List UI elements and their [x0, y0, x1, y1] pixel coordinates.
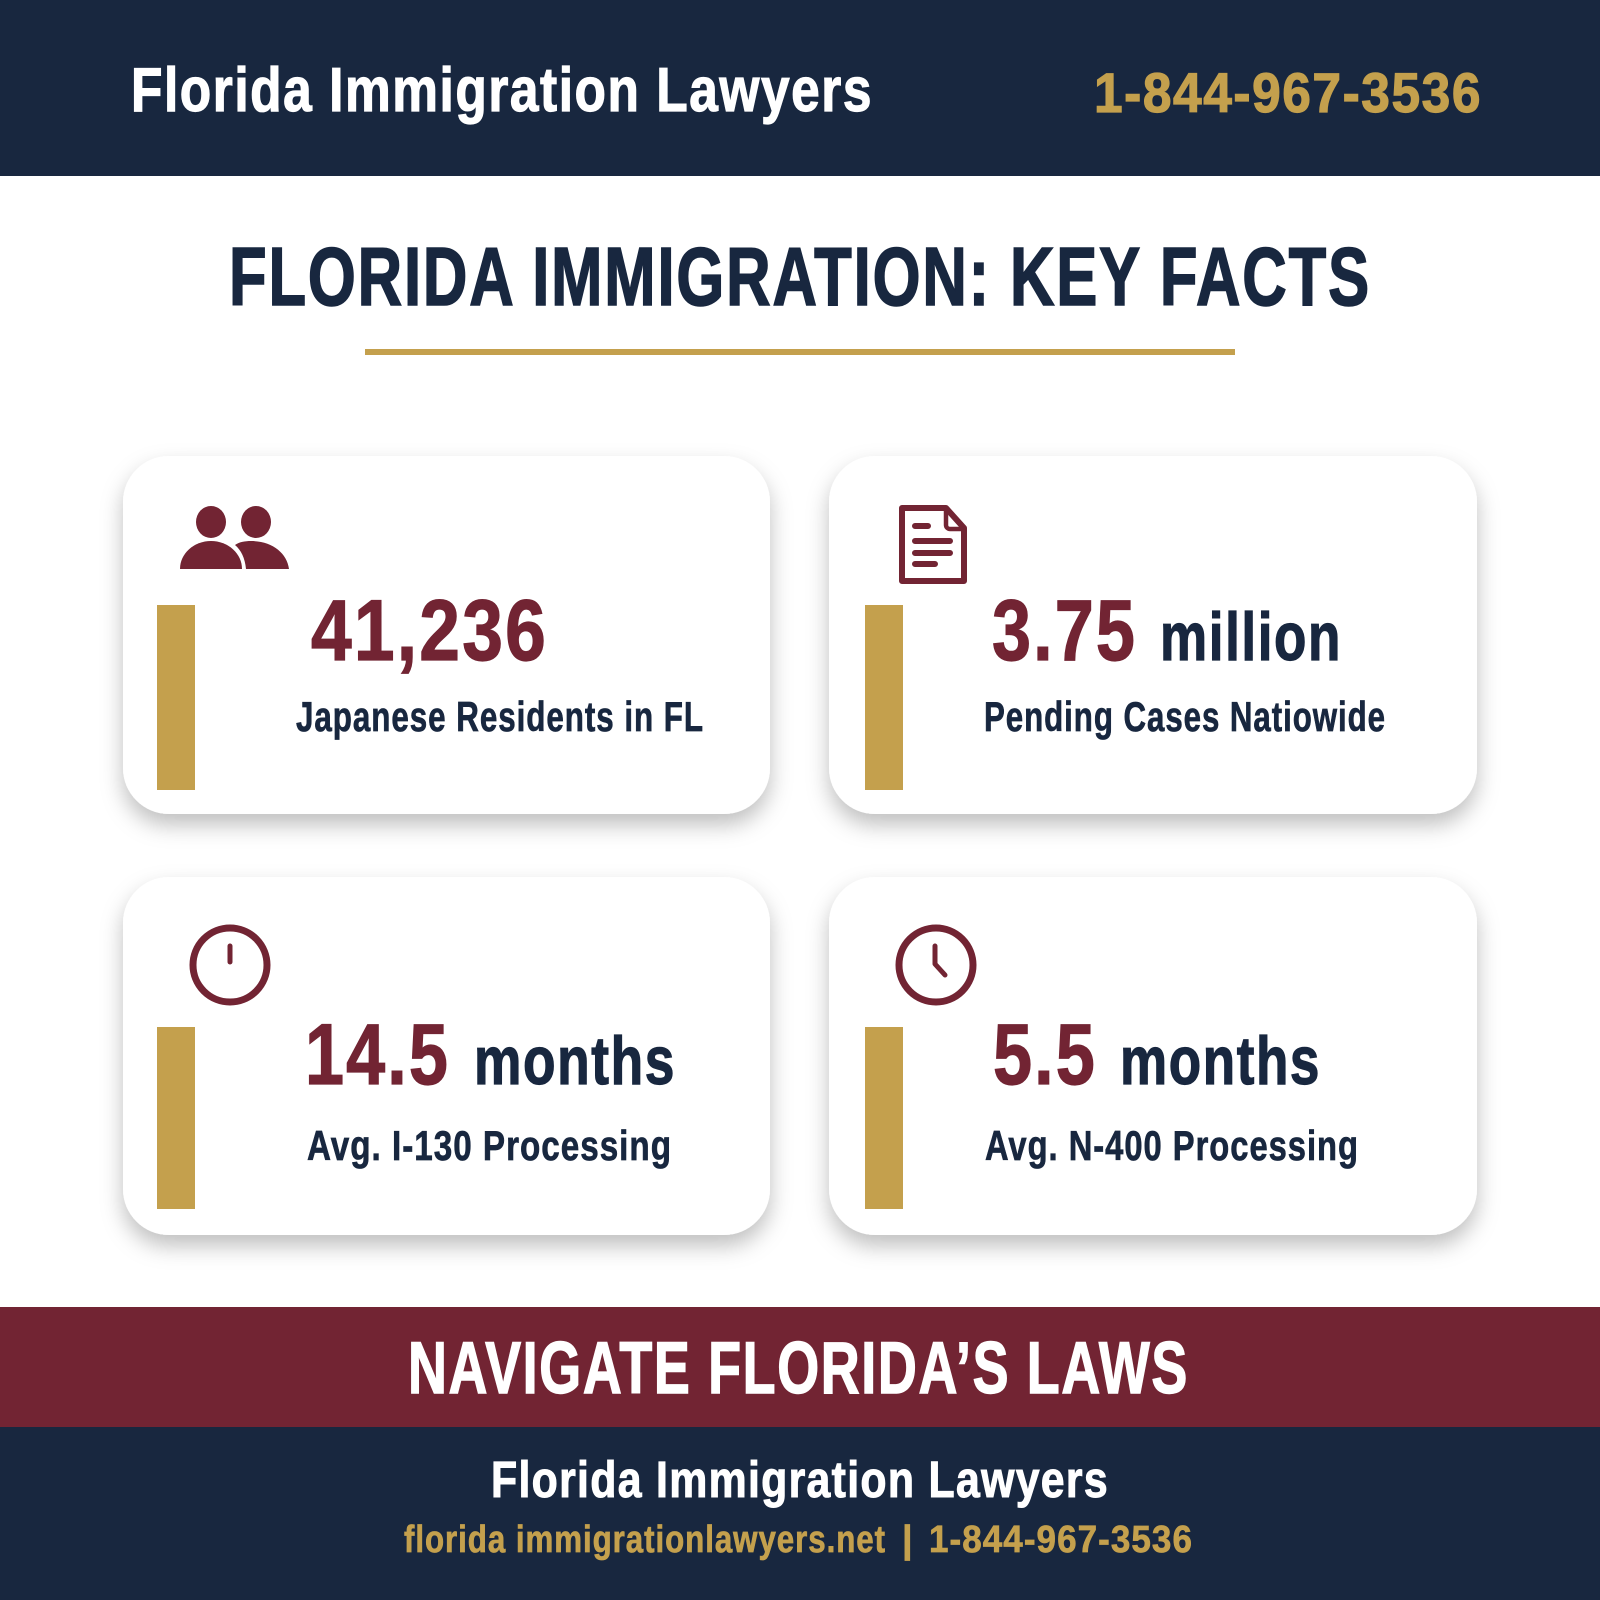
footer contact line: |	[902, 1519, 914, 1561]
gold bar	[157, 605, 195, 790]
panel: Japanese residents	[123, 456, 770, 814]
icon: document	[902, 508, 964, 581]
header firm name: Florida Immigration Lawyers	[131, 56, 873, 125]
icon: clock	[899, 928, 973, 1002]
footer firm name: Florida Immigration Lawyers	[491, 1451, 1109, 1508]
gold bar	[865, 605, 903, 790]
stat label: Avg. N-400 Processing	[985, 1122, 1359, 1169]
footer contact line: florida immigrationlawyers.net	[404, 1519, 886, 1561]
header bar	[0, 0, 1600, 176]
stat value: 14.5	[305, 1007, 450, 1103]
footer	[0, 1427, 1600, 1600]
stat value: months	[1120, 1023, 1321, 1099]
stat label: Avg. I-130 Processing	[307, 1122, 672, 1169]
icon: clock with single hand	[193, 928, 267, 1002]
stat value: months	[474, 1023, 676, 1099]
stat label: Japanese Residents in FL	[296, 693, 704, 740]
stat value: 41,236	[311, 583, 548, 679]
banner text: NAVIGATE FLORIDA’S LAWS	[408, 1328, 1189, 1409]
icon: people	[180, 506, 289, 569]
stat value: 5.5	[993, 1007, 1097, 1103]
stat value: 3.75	[992, 583, 1137, 679]
gold bar	[865, 1027, 903, 1209]
panel: I-130 processing	[123, 877, 770, 1235]
panel: pending cases	[829, 456, 1477, 814]
stat value	[992, 583, 1342, 679]
call-to-action banner	[0, 1307, 1600, 1427]
stat value	[993, 1007, 1321, 1103]
header phone number: 1-844-967-3536	[1094, 61, 1482, 124]
title underline	[365, 349, 1235, 355]
panel: N-400 processing	[829, 877, 1477, 1235]
gold bar	[157, 1027, 195, 1209]
footer contact line: 1-844-967-3536	[929, 1519, 1193, 1561]
stat value	[305, 1007, 676, 1103]
stat label: Pending Cases Natiowide	[984, 693, 1386, 740]
stat value: million	[1160, 599, 1342, 675]
